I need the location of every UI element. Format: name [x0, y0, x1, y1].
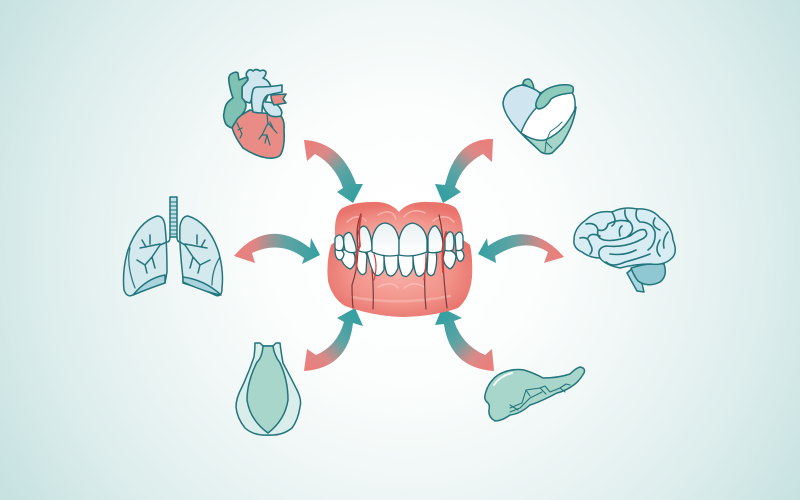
- heart: vena cava and atrium: [224, 72, 248, 128]
- upper gum: [335, 202, 463, 252]
- icon: bulb-shaped organ: [236, 343, 301, 435]
- arrow: lungs to mouth: [234, 234, 320, 264]
- organ: left chamber: [503, 85, 540, 133]
- organ: outer wall: [236, 343, 301, 435]
- upper teeth: [335, 223, 463, 256]
- lower teeth: [335, 250, 464, 276]
- icon: lungs: [124, 197, 222, 296]
- lungs: diaphragm lobes: [133, 275, 221, 295]
- arrow: kidney organ to mouth: [304, 308, 363, 371]
- icon: anatomical heart: [224, 70, 286, 158]
- organ: lower section: [521, 107, 576, 154]
- gum recession cracks: [352, 214, 447, 309]
- lungs: right lung: [180, 216, 222, 296]
- illustration: teeth and gums: [327, 202, 472, 317]
- brain: folds: [580, 209, 668, 265]
- icon: brain: [574, 208, 675, 292]
- lungs: trachea: [170, 197, 177, 237]
- lungs: bronchi: [137, 235, 210, 273]
- icon: heart-shaped organ: [503, 79, 576, 154]
- heart: aorta: [242, 70, 282, 117]
- arrow: stomach organ to mouth: [435, 139, 493, 203]
- organ: top vessel stub: [523, 79, 534, 89]
- icon: pancreas: [485, 367, 584, 421]
- arrow: heart to mouth: [304, 140, 363, 203]
- lungs: left lung: [124, 216, 167, 296]
- heart: ventricle: [232, 110, 284, 158]
- arrow: pancreas to mouth: [435, 308, 494, 371]
- heart: pulmonary stubs: [271, 94, 286, 105]
- organ: inner chamber: [247, 346, 288, 433]
- brain: cerebrum: [574, 208, 675, 268]
- lower gum: [327, 230, 472, 317]
- brain: cerebellum: [631, 264, 665, 285]
- arrow: brain to mouth: [478, 234, 564, 263]
- heart: pulmonary trunk: [252, 85, 282, 113]
- organ: curved vessel: [536, 85, 573, 109]
- brain: stem: [627, 268, 644, 292]
